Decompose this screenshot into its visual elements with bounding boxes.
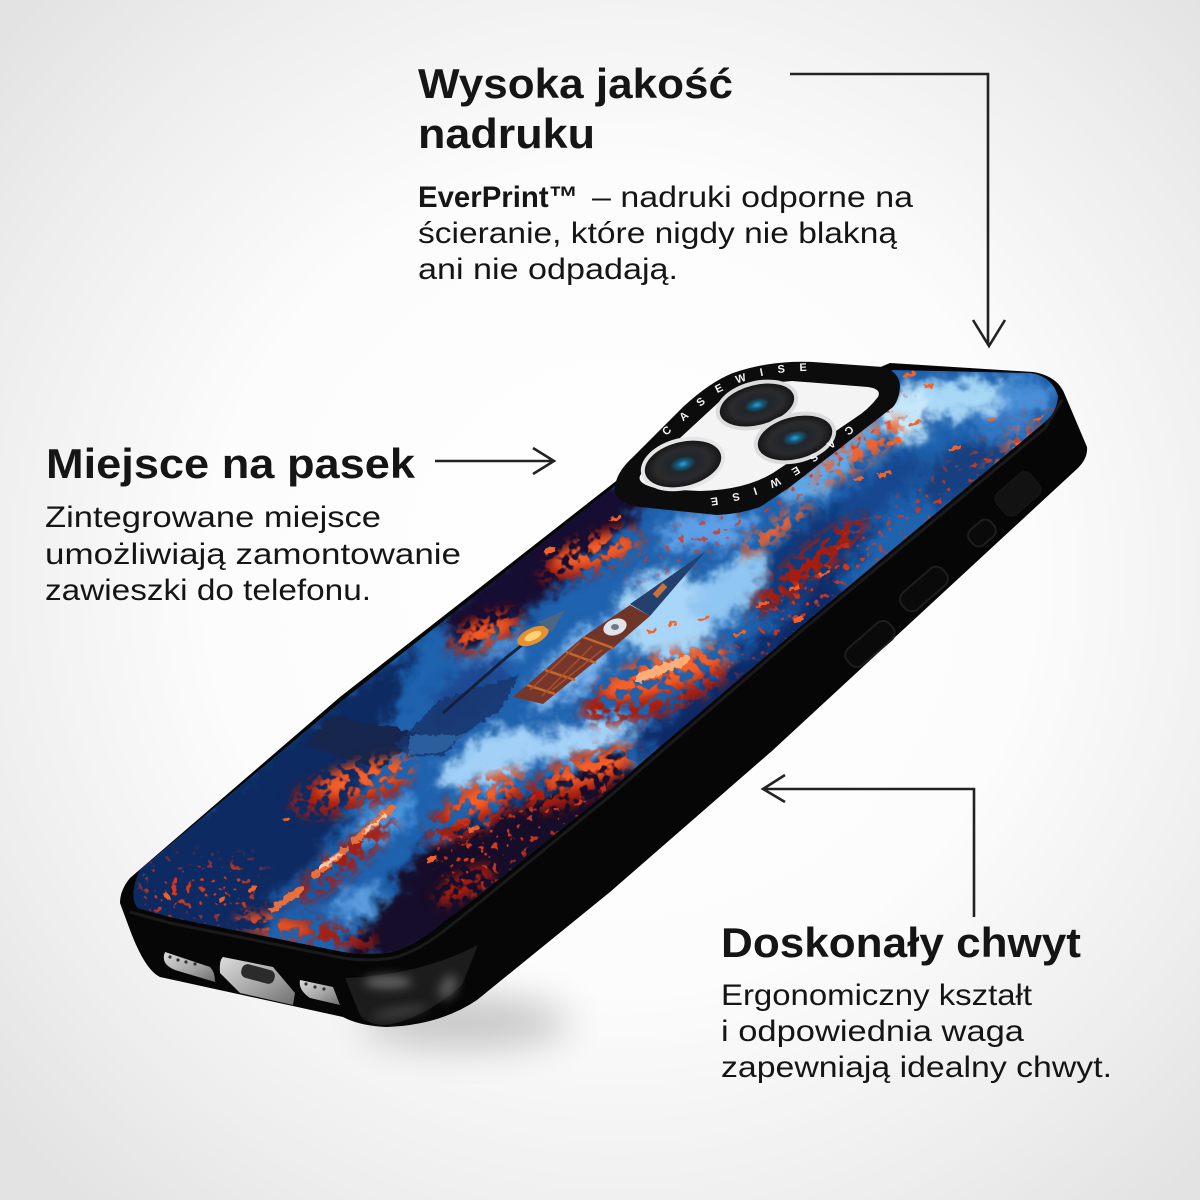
camera ring — [615, 362, 900, 515]
case body — [120, 363, 1087, 1027]
phone shadow — [360, 998, 570, 1046]
lens left — [635, 428, 731, 500]
body text: zawieszki do telefonu. — [45, 574, 371, 607]
body text — [418, 181, 913, 286]
arrow: to strap slot — [435, 448, 554, 474]
painted clouds — [110, 378, 1051, 960]
body text: EverPrint™ — [418, 181, 578, 214]
lens right — [748, 404, 842, 472]
body text: ani nie odpadają. — [418, 253, 678, 286]
body text: i odpowiednia waga — [721, 1015, 1024, 1048]
body text: Zintegrowane miejsce — [45, 501, 381, 534]
leaves bright orange layer — [234, 410, 1037, 939]
heading: nadruku — [418, 110, 595, 157]
heading: Doskonały chwyt — [721, 919, 1081, 966]
charging and speaker ports — [164, 952, 340, 1005]
callout: grip — [721, 919, 1112, 1084]
body text: umożliwiają zamontowanie — [45, 538, 461, 571]
clock tower — [513, 552, 705, 704]
arrow: to grip — [763, 775, 974, 917]
heading — [418, 60, 733, 157]
scattered brush strokes — [165, 374, 1041, 900]
camera glass — [640, 381, 879, 491]
arrow: to print — [790, 74, 1005, 346]
scattered fine leaves — [140, 400, 1050, 920]
lens top — [710, 372, 804, 438]
callout: strap slot — [45, 440, 461, 607]
distant buildings — [305, 675, 520, 770]
body text — [721, 979, 1112, 1084]
phone in case — [120, 362, 1088, 1027]
side buttons — [842, 469, 1044, 671]
heading: Wysoka jakość — [418, 60, 733, 107]
heading: Miejsce na pasek — [46, 440, 416, 487]
camera bump — [614, 362, 900, 515]
body text: – nadruki odporne na — [592, 181, 913, 214]
callout: print quality — [418, 60, 913, 286]
case rim — [130, 400, 1062, 960]
ring lettering bottom: CASEWISE — [710, 426, 853, 506]
case glossy corner — [345, 945, 478, 1025]
street lamp — [443, 610, 565, 713]
glowing leaf centres and painted streak — [272, 660, 685, 910]
leaves dark red layer — [239, 505, 878, 956]
body text — [45, 501, 461, 607]
body text: zapewniają idealny chwyt. — [721, 1051, 1112, 1084]
body text: Ergonomiczny kształt — [721, 979, 1033, 1012]
body text: ścieranie, które nigdy nie blakną — [418, 217, 897, 250]
printed artwork — [133, 370, 1058, 954]
ring lettering top: CASEWISE — [662, 363, 806, 434]
